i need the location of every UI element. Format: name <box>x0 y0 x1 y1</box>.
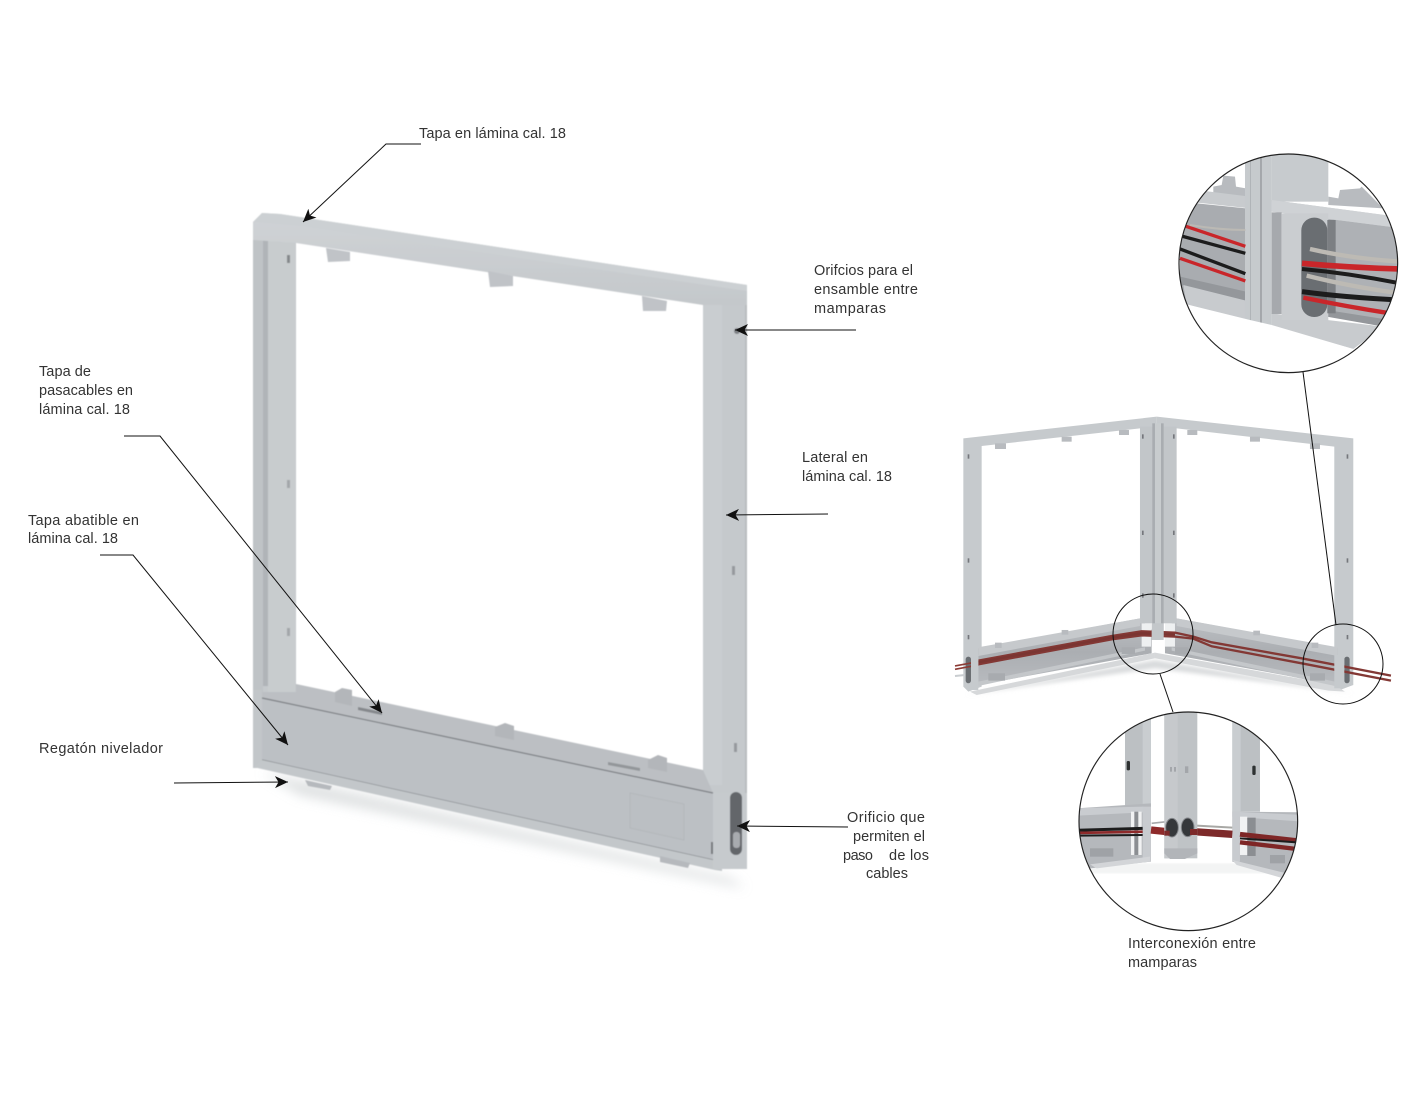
label: side: lámina cal. 18 <box>802 469 892 485</box>
label: cable cover: pasacables en <box>39 383 133 399</box>
label: cable hole: paso <box>843 848 873 864</box>
label: cable cover: Tapa de <box>39 364 91 380</box>
floor shadow <box>262 772 745 888</box>
top detail circle: cable slot <box>1178 153 1398 374</box>
interior right <box>1328 219 1397 319</box>
arrow: cable hole <box>737 826 848 827</box>
post cable holes <box>1166 818 1178 837</box>
label: hinged cover <box>28 513 139 547</box>
main screen frame illustration <box>253 213 747 888</box>
joint openings behind cables <box>1142 623 1175 647</box>
slot opening <box>1301 218 1327 317</box>
arrow: hinged cover <box>100 555 288 745</box>
label: side: Lateral en <box>802 450 868 466</box>
centre post <box>1164 712 1197 858</box>
label: assembly holes: Orifcios para el <box>814 263 913 279</box>
end uprights over cables <box>971 655 1344 690</box>
cables right <box>1180 224 1400 313</box>
right frame in detail <box>1232 722 1260 812</box>
central column <box>1140 423 1177 640</box>
left upright <box>253 222 296 768</box>
label: side <box>802 450 892 485</box>
right upright <box>703 290 747 865</box>
arrow: levelling foot <box>174 782 288 783</box>
upper rails <box>1198 191 1245 208</box>
label: assembly holes: ensamble entre <box>814 282 918 298</box>
red cables <box>955 631 1391 681</box>
cables left <box>1180 224 1245 246</box>
label: hinged cover: Tapa abatible en <box>28 513 139 529</box>
label: cable hole: Orificio que <box>847 810 925 826</box>
cable pass-through slot <box>713 792 747 869</box>
leader: end slot to top detail <box>1303 372 1336 625</box>
label: hinged cover: lámina cal. 18 <box>28 531 118 547</box>
left frame in detail <box>1125 722 1143 806</box>
hinged cover panel <box>253 690 722 871</box>
right panel of corner assembly <box>1155 417 1353 692</box>
label: levelling foot: Regatón nivelador <box>39 741 163 757</box>
label: cable cover: lámina cal. 18 <box>39 402 130 418</box>
label: cable hole: de los <box>889 848 929 864</box>
top cover <box>253 213 747 305</box>
leader: corner joint to bottom detail <box>1160 674 1173 712</box>
infographic canvas <box>28 127 1398 970</box>
cables across detail <box>1077 822 1300 849</box>
corner assembly illustration <box>955 417 1391 695</box>
magnifier circle: corner joint <box>1113 594 1193 674</box>
label: cable hole <box>843 810 929 882</box>
bottom detail circle: interconnection <box>1078 711 1298 932</box>
left panel of corner assembly <box>963 417 1157 695</box>
label: cable hole: permiten el <box>853 829 925 845</box>
magnifier circle: end slot <box>1303 624 1383 704</box>
label: interconnection: Interconexión entre <box>1128 936 1256 952</box>
arrow: side <box>726 514 828 515</box>
ground shadow <box>1090 864 1263 873</box>
label: assembly holes <box>814 263 918 317</box>
label: top cover: Tapa en lámina cal. 18 <box>419 126 566 142</box>
label: interconnection <box>1128 936 1256 971</box>
corner floor shadow <box>965 660 1353 695</box>
arrow: assembly holes <box>735 329 856 331</box>
label: cable cover <box>39 364 133 418</box>
bottom rail and tabs <box>262 684 713 793</box>
tabs behind rail <box>1213 176 1245 196</box>
column <box>1245 145 1272 327</box>
arrow: top cover <box>303 144 421 222</box>
interior left <box>1180 204 1245 300</box>
top tabs <box>326 248 667 311</box>
arrow: cable cover <box>124 436 382 713</box>
label: interconnection: mamparas <box>1128 955 1197 971</box>
white floor area <box>1188 304 1353 349</box>
label: assembly holes: mamparas <box>814 301 886 317</box>
label: cable hole: cables <box>866 866 908 882</box>
